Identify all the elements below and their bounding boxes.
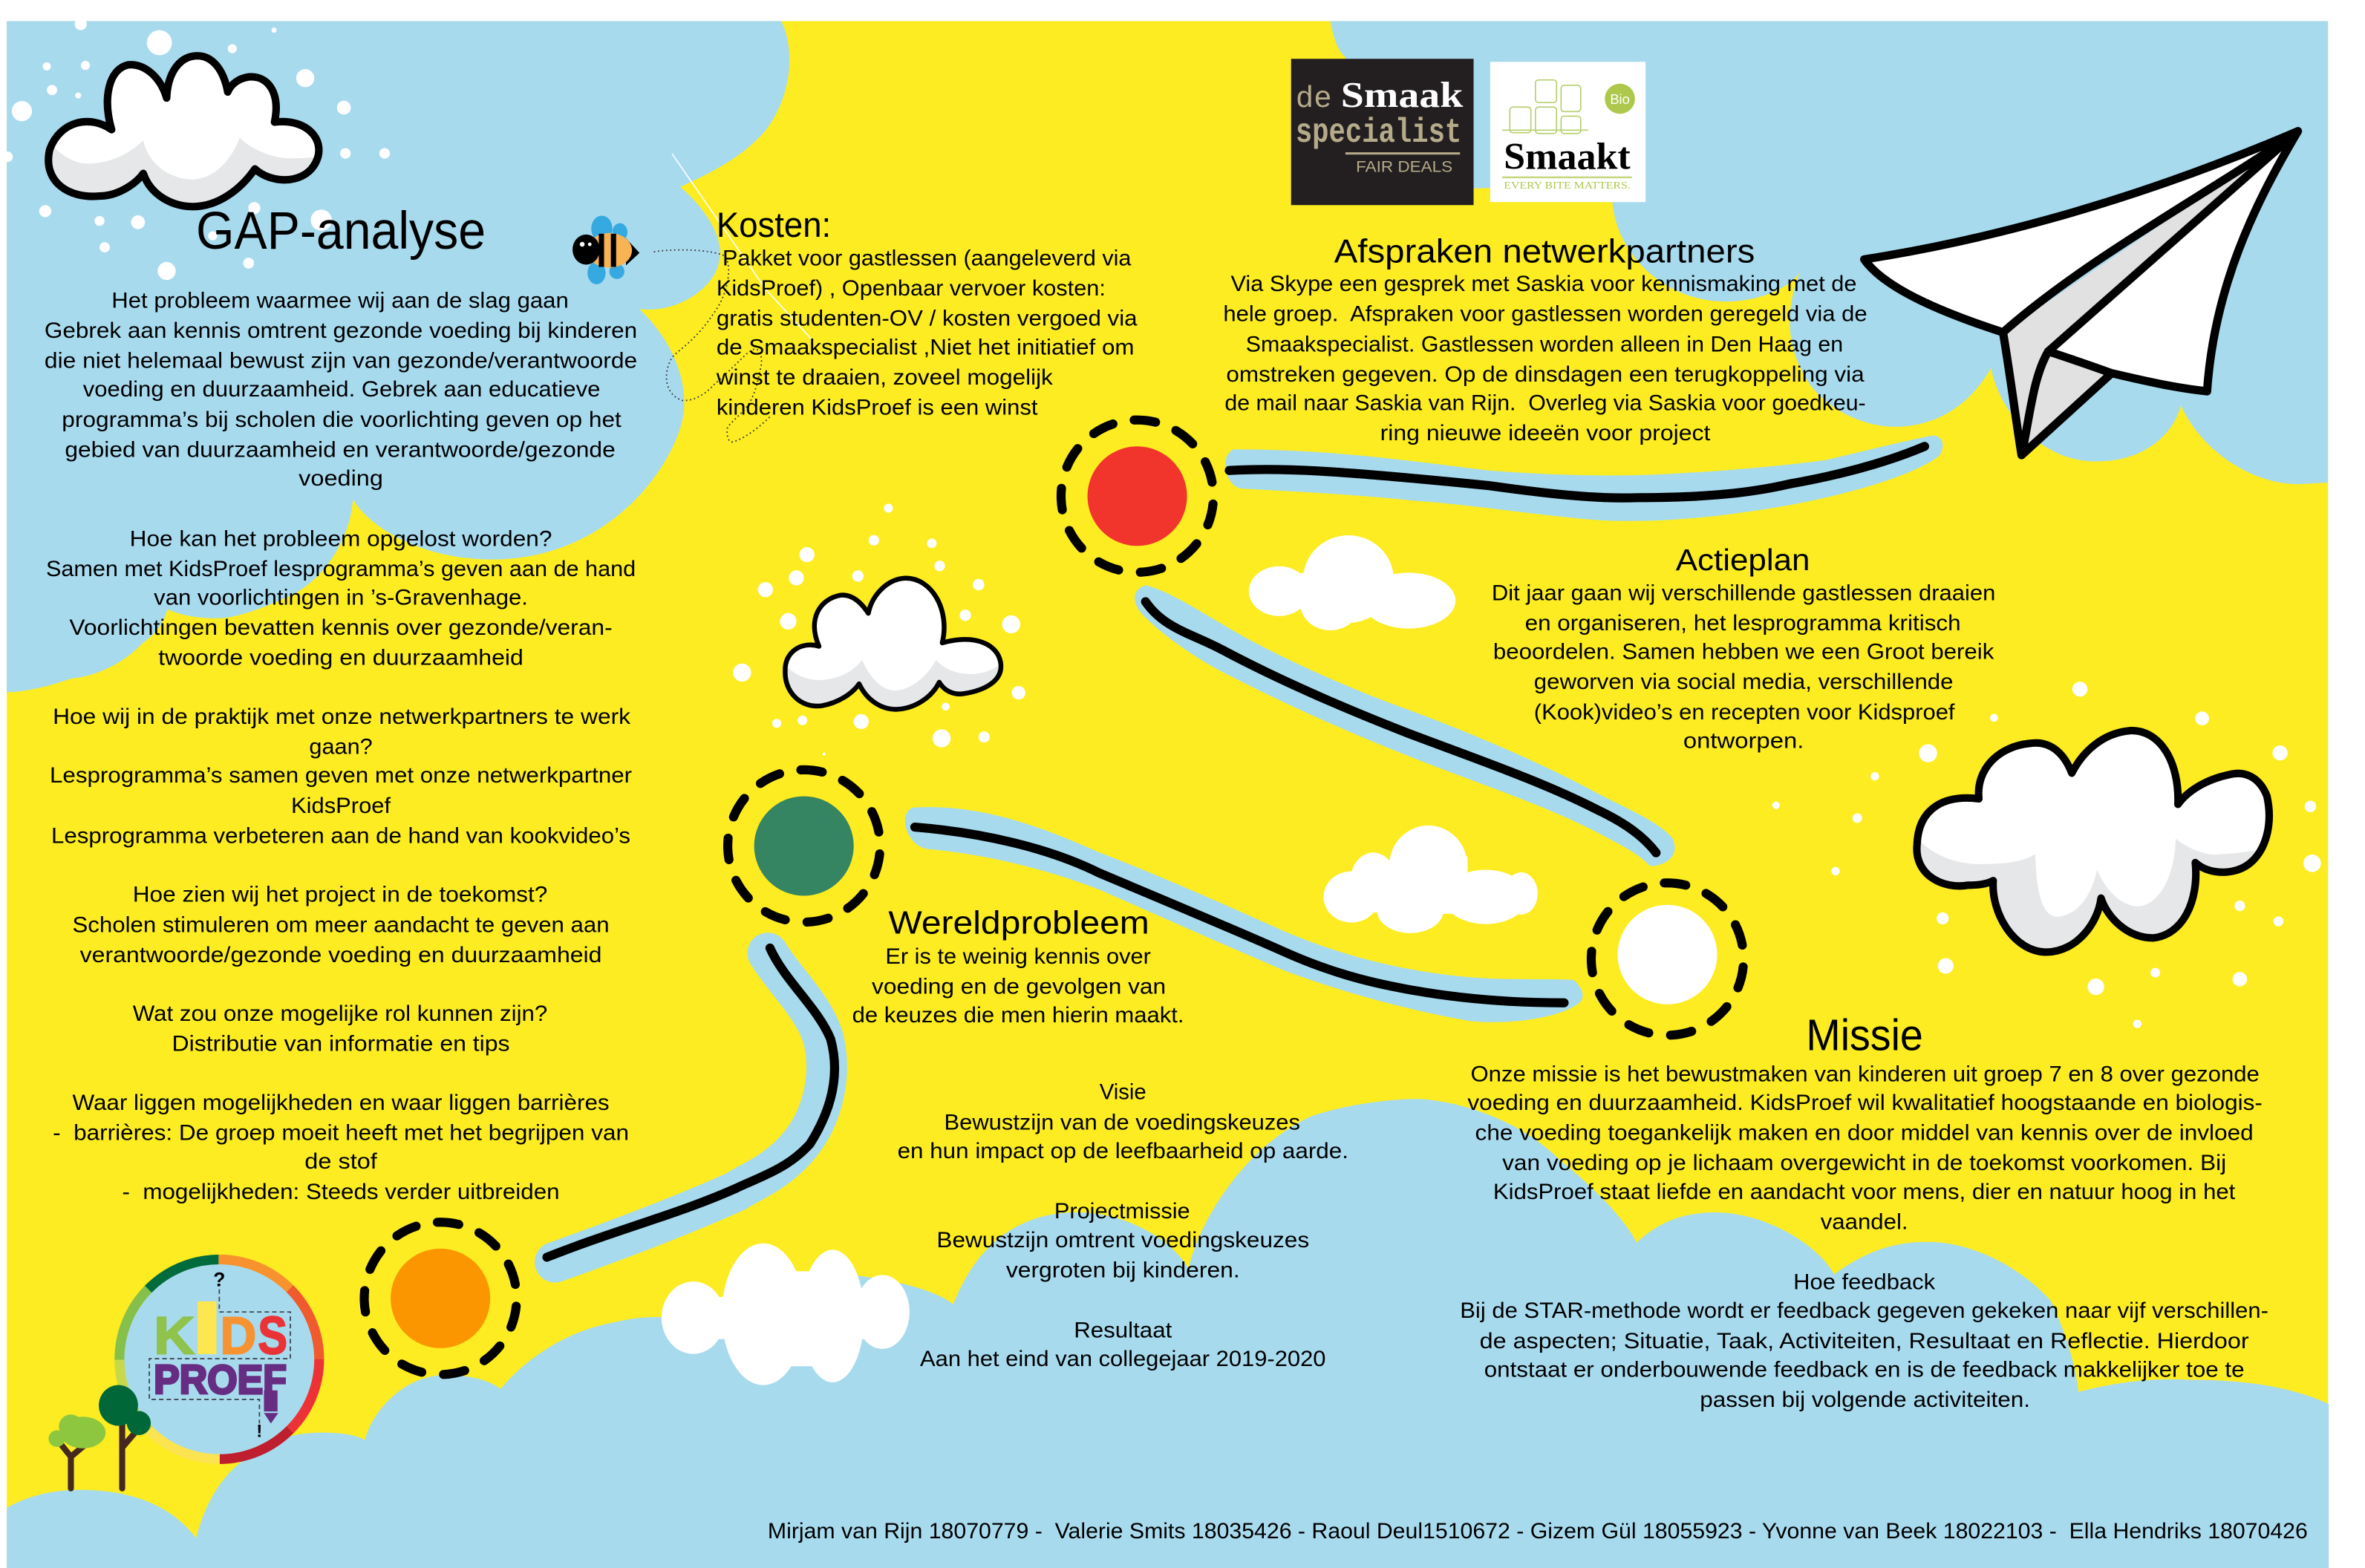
text block: Hoe feedback: passen bij volgende activiteiten. (1700, 1388, 2030, 1412)
arrow: road from orange dot to green dot (547, 948, 835, 1262)
icon: outlined cloud middle (783, 576, 1004, 712)
text block: GAP-analyse body: - mogelijkheden: Steeds verder uitbreiden (123, 1180, 560, 1204)
text block: Actieplan body: (Kook)video’s en recepten voor Kidsproef (1534, 700, 1955, 725)
text block: Visie, Projectmissie, Resultaat: vergroten bij kinderen. (1006, 1258, 1240, 1282)
text block: Visie, Projectmissie, Resultaat: Projectmissie (1054, 1199, 1190, 1224)
text block: Visie, Projectmissie, Resultaat: Bewustzijn omtrent voedingskeuzes (936, 1228, 1309, 1252)
text block: GAP-analyse body: gebied van duurzaamheid en verantwoorde/gezonde (65, 437, 616, 462)
text block: Afspraken body (1223, 272, 1867, 445)
text block: Visie, Projectmissie, Resultaat (898, 1080, 1348, 1371)
heading: Missie: Missie (1806, 1012, 1923, 1060)
heading: Kosten: Kosten: (717, 206, 831, 245)
text block: GAP-analyse body: programma’s bij scholen die voorlichting geven op het (62, 408, 622, 432)
decorative white dots around the right cloud (1772, 682, 2321, 1028)
text block: Missie body (1467, 1062, 2263, 1234)
text block: GAP-analyse body: die niet helemaal bewust zijn van gezonde/verantwoorde (45, 349, 637, 373)
text block: Afspraken body: de mail naar Saskia van Rijn. Overleg via Saskia voor goedkeu- (1224, 391, 1866, 415)
text block: Hoe feedback: Hoe feedback (1793, 1270, 1935, 1295)
text block: Missie body: van voeding op je lichaam overgewicht in de toekomst voorkomen. Bij (1502, 1151, 2226, 1175)
text block: Wereldprobleem body (852, 944, 1184, 1028)
text block: Hoe feedback: ontstaat er onderbouwende feedback en is de feedback makkelijker toe te (1484, 1357, 2245, 1382)
text block: Actieplan body: geworven via social media, verschillende (1534, 670, 1953, 694)
text block: GAP-analyse body (45, 288, 637, 1204)
text block: Visie, Projectmissie, Resultaat: Bewustzijn van de voedingskeuzes (945, 1110, 1300, 1134)
text block: Kosten body: de Smaakspecialist ,Niet het initiatief om (717, 335, 1134, 359)
text block: Actieplan body: Dit jaar gaan wij verschillende gastlessen draaien (1492, 581, 1995, 605)
logo: de Smaak specialist: FAIR DEALS (1356, 158, 1452, 176)
text block: Missie body: KidsProef staat liefde en aandacht voor mens, dier en natuur hoog in het (1493, 1180, 2235, 1204)
logo word KIDS: D (221, 1307, 256, 1365)
icon: white dot (1588, 880, 1746, 1038)
icon: plain white cloud near Actieplan (1249, 535, 1455, 630)
logo ring segments (120, 1259, 319, 1459)
text block: Kosten body: kinderen KidsProef is een winst (717, 396, 1037, 420)
text block: Kosten body: gratis studenten-OV / kosten vergoed via (717, 307, 1138, 331)
text block: Afspraken body: Smaakspecialist. Gastlessen worden alleen in Den Haag en (1246, 332, 1843, 356)
text block: GAP-analyse body: Het probleem waarmee wij aan de slag gaan (111, 288, 569, 313)
text block: Afspraken body: ring nieuwe ideeën voor project (1380, 421, 1710, 445)
text block: Wereldprobleem body: Er is te weinig kennis over (885, 944, 1151, 969)
icon: red dot (1058, 417, 1216, 575)
text block: Visie, Projectmissie, Resultaat: en hun impact op de leefbaarheid op aarde. (898, 1139, 1348, 1163)
decorative white dots around the middle cloud (733, 503, 1025, 756)
text block: GAP-analyse body: de stof (304, 1149, 378, 1174)
logo: Smaakt bio: EVERY BITE MATTERS. (1504, 180, 1631, 191)
thin white diagonal line (672, 154, 813, 341)
text block: GAP-analyse body: Scholen stimuleren om meer aandacht te geven aan (72, 912, 610, 937)
text block: Missie body: che voeding toegankelijk maken en door middel van kennis over de invloed (1475, 1121, 2254, 1146)
text block: Actieplan body: en organiseren, het lesprogramma kritisch (1525, 611, 1961, 636)
text block: Kosten body: winst te draaien, zoveel mogelijk (716, 365, 1053, 390)
text block: GAP-analyse body: Lesprogramma’s samen geven met onze netwerkpartner (50, 763, 632, 788)
text block: Kosten body: Pakket voor gastlessen (aangeleverd via (722, 246, 1132, 270)
text block: Wereldprobleem body: de keuzes die men hierin maakt. (852, 1003, 1184, 1028)
icon: green dot (725, 767, 883, 925)
text block: Afspraken body: Via Skype een gesprek met Saskia voor kennismaking met de (1231, 272, 1856, 296)
text block: Hoe feedback (1460, 1270, 2268, 1412)
arrow: road from white dot to red dot (1135, 585, 1674, 866)
icon: outlined cloud top-left (38, 56, 332, 219)
text block: GAP-analyse body: Hoe zien wij het project in de toekomst? (133, 883, 547, 907)
text block: GAP-analyse body: Wat zou onze mogelijke rol kunnen zijn? (133, 1002, 547, 1026)
icon: paper plane (1865, 131, 2298, 455)
text block: GAP-analyse body: voeding (299, 466, 383, 491)
text block: GAP-analyse body: van voorlichtingen in ’s-Gravenhage. (154, 585, 528, 610)
icon: outlined cloud right (1908, 731, 2277, 965)
text block: Afspraken body: hele groep. Afspraken voor gastlessen worden geregeld via de (1223, 302, 1867, 327)
footer: team members: Mirjam van Rijn 18070779 - Valerie Smits 18035426 - Raoul Deul1510672 - Gizem Gül 18055923 - Yvonne van Beek 18022103 - Ella Hendriks 18070426 (768, 1519, 2308, 1544)
text block: GAP-analyse body: Waar liggen mogelijkheden en waar liggen barrières (72, 1091, 610, 1115)
logo: Smaakt bio: Bio (1610, 91, 1630, 107)
arrow: road from white dot to green dot (905, 807, 1582, 1022)
text block: GAP-analyse body: Samen met KidsProef lesprogramma’s geven aan de hand (46, 557, 636, 581)
text block: GAP-analyse body: Distributie van informatie en tips (172, 1032, 510, 1056)
panel: blue sky bottom (7, 1099, 2329, 1568)
logo: de Smaak specialist: Smaak (1341, 75, 1464, 115)
heading: Wereldprobleem: Wereldprobleem (888, 904, 1149, 941)
text block: Hoe feedback: de aspecten; Situatie, Taak, Activiteiten, Resultaat en Reflectie. Hierdoor (1480, 1329, 2249, 1353)
text block: Missie body: Onze missie is het bewustmaken van kinderen uit groep 7 en 8 over gezonde (1470, 1062, 2260, 1086)
heading: Actieplan: Actieplan (1676, 543, 1810, 577)
logo word KIDS: K (154, 1307, 195, 1365)
text block: GAP-analyse body: Hoe kan het probleem opgelost worden? (130, 526, 552, 551)
logo question mark: ? (213, 1269, 225, 1291)
text block: GAP-analyse body: Lesprogramma verbeteren aan de hand van kookvideo’s (51, 823, 630, 848)
icon: plain white cloud centre (1323, 826, 1538, 933)
logo: Smaakt bio: Smaakt (1504, 135, 1631, 177)
text block: GAP-analyse body: gaan? (309, 735, 373, 760)
text block: Wereldprobleem body: voeding en de gevolgen van (872, 975, 1166, 999)
text block: Hoe feedback: Bij de STAR-methode wordt er feedback gegeven gekeken naar vijf verschillen- (1460, 1298, 2268, 1323)
text block: Kosten body: KidsProef) , Openbaar vervoer kosten: (717, 276, 1106, 301)
text block: Visie, Projectmissie, Resultaat: Resultaat (1074, 1319, 1172, 1343)
title: GAP-analyse: GAP-analyse (196, 202, 486, 261)
text block: Visie, Projectmissie, Resultaat: Visie (1100, 1080, 1146, 1105)
logo word KIDS (154, 1301, 287, 1365)
text block: Missie body: voeding en duurzaamheid. KidsProef wil kwalitatief hoogstaande en biologis- (1467, 1091, 2263, 1115)
panel: blue sky top-left (7, 21, 789, 692)
text block: Missie body: vaandel. (1821, 1209, 1908, 1234)
logo word PROEF: PROEF (154, 1356, 287, 1402)
heading: Afspraken netwerkpartners: Afspraken netwerkpartners (1334, 233, 1755, 270)
icon: bee (573, 215, 639, 284)
logo: de Smaak specialist (1291, 59, 1474, 205)
icon: trees (48, 1385, 151, 1489)
decorative white dots around the top-left cloud (2, 18, 390, 280)
text block: Kosten body (716, 246, 1138, 420)
logo: Smaakt bio (1490, 62, 1645, 202)
text block: GAP-analyse body: Hoe wij in de praktijk met onze netwerkpartners te werk (53, 705, 630, 729)
text block: GAP-analyse body: - barrières: De groep moeit heeft met het begrijpen van (53, 1121, 629, 1146)
text block: GAP-analyse body: twoorde voeding en duurzaamheid (158, 646, 523, 670)
text block: Afspraken body: omstreken gegeven. Op de dinsdagen een terugkoppeling via (1226, 362, 1865, 387)
panel: blue sky top-right (1331, 21, 2328, 484)
text block: Actieplan body: beoordelen. Samen hebben we een Groot bereik (1493, 640, 1994, 664)
logo dashed frame (149, 1290, 290, 1423)
logo: de Smaak specialist: de (1296, 82, 1332, 117)
text block: GAP-analyse body: verantwoorde/gezonde voeding en duurzaamheid (80, 943, 601, 967)
text block: Visie, Projectmissie, Resultaat: Aan het eind van collegejaar 2019-2020 (920, 1347, 1325, 1371)
text block: GAP-analyse body: voeding en duurzaamheid. Gebrek aan educatieve (83, 377, 600, 402)
arrow: road from red dot to paper plane (1225, 436, 1942, 521)
logo exclamation mark: ! (256, 1422, 262, 1442)
text block: GAP-analyse body: Gebrek aan kennis omtrent gezonde voeding bij kinderen (45, 318, 637, 343)
icon: orange dot (362, 1219, 520, 1377)
icon: plain white cloud bottom (662, 1244, 910, 1385)
text block: Actieplan body (1492, 581, 1995, 753)
logo: KidsProef (120, 1259, 319, 1459)
text block: GAP-analyse body: Voorlichtingen bevatten kennis over gezonde/veran- (69, 615, 613, 640)
logo word KIDS: S (258, 1307, 287, 1365)
logo word PROEF (154, 1356, 287, 1423)
text block: GAP-analyse body: KidsProef (291, 794, 391, 818)
text block: Actieplan body: ontworpen. (1683, 728, 1804, 753)
logo: de Smaak specialist: specialist (1296, 114, 1461, 153)
dotted bee flight path (654, 250, 771, 442)
